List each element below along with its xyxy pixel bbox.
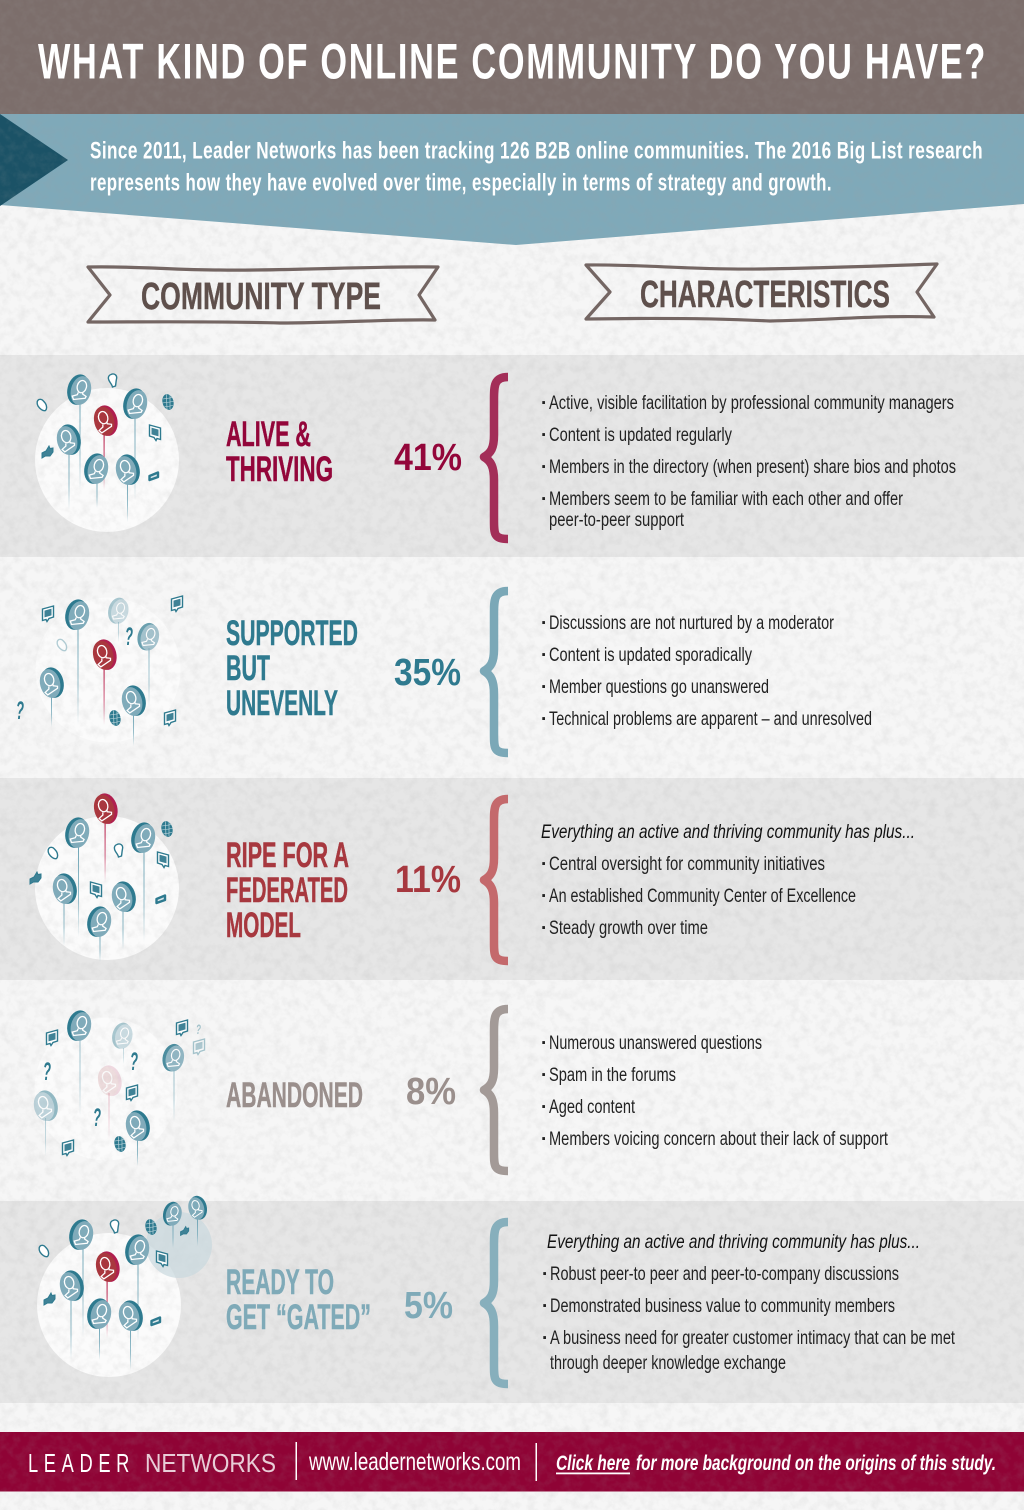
characteristics: row 3: · (541, 886, 547, 907)
characteristics: row 4: Spam in the forums (549, 1065, 676, 1086)
label: supported but unevenly: UNEVENLY (226, 684, 338, 723)
label: supported but unevenly: BUT (226, 649, 270, 688)
brace: row 2 (484, 591, 508, 753)
percent: 35: 35% (394, 652, 461, 694)
characteristics: row 4: Aged content (549, 1097, 636, 1118)
characteristics: row 2: Discussions are not nurtured by a moderator (549, 613, 834, 634)
characteristics: row 1: Content is updated regularly (549, 425, 732, 446)
label: ready to get gated (226, 1263, 371, 1337)
footer divider (536, 1443, 537, 1481)
characteristics: row 2: Content is updated sporadically (549, 645, 752, 666)
characteristics: row 3: Everything an active and thriving community has plus... (541, 822, 915, 843)
icon cluster: abandoned: ? (130, 1048, 138, 1076)
label: ripe for a federated model: MODEL (226, 906, 301, 945)
characteristics: row 2 (541, 613, 872, 730)
percent: 41: 41% (394, 437, 462, 479)
banner arrow (0, 114, 68, 206)
icon cluster: ripe for a federated model (30, 791, 174, 962)
header band (0, 0, 1024, 114)
label: supported but unevenly: SUPPORTED (226, 614, 358, 653)
footer logo (28, 1448, 276, 1478)
characteristics: row 5: through deeper knowledge exchange (550, 1353, 786, 1374)
characteristics: row 4: Numerous unanswered questions (549, 1033, 762, 1054)
percent: 11: 11% (395, 859, 461, 901)
brace: row 3 (484, 799, 508, 961)
characteristics: row 5: · (542, 1296, 548, 1317)
footer band (0, 1432, 1024, 1492)
characteristics: row 4 (541, 1033, 889, 1150)
characteristics: row 5: · (542, 1264, 548, 1285)
characteristics: row 1: · (541, 457, 547, 478)
characteristics: row 5: · (542, 1328, 548, 1349)
brace: row 1 (484, 377, 508, 539)
characteristics: row 1: · (541, 425, 547, 446)
characteristics: row 1: Members seem to be familiar with each other and offer (549, 489, 904, 510)
heading ribbon: community type: COMMUNITY TYPE (141, 276, 381, 318)
characteristics: row 4: · (541, 1065, 547, 1086)
characteristics: row 5 (542, 1232, 956, 1374)
characteristics: row 2: Technical problems are apparent – and unresolved (549, 709, 872, 730)
label: alive and thriving (226, 415, 333, 489)
label: alive and thriving: ALIVE & (226, 415, 311, 454)
icon cluster: supported but unevenly (16, 596, 182, 746)
footer call to action: Click here (556, 1451, 630, 1475)
footer logo: LEADER (28, 1448, 135, 1478)
characteristics: row 4: · (541, 1033, 547, 1054)
intro text (90, 138, 983, 196)
heading ribbon: characteristics (586, 264, 937, 321)
heading ribbon: community type (88, 267, 438, 323)
characteristics: row 5: Everything an active and thriving community has plus... (547, 1232, 920, 1253)
footer url: www.leadernetworks.com (308, 1448, 521, 1476)
characteristics: row 2: · (541, 613, 547, 634)
white circles behind icons (34, 388, 181, 1377)
label: ready to get gated: GET “GATED” (226, 1298, 371, 1337)
brace: row 5 (484, 1222, 508, 1384)
characteristics: row 4: · (541, 1129, 547, 1150)
percent: 8: 8% (406, 1071, 456, 1113)
characteristics: row 1: · (541, 393, 547, 414)
characteristics: row 1: peer-to-peer support (549, 510, 685, 531)
characteristics: row 5: Robust peer-to peer and peer-to-company discussions (550, 1264, 899, 1285)
heading ribbon: characteristics: CHARACTERISTICS (640, 274, 890, 316)
icon cluster: supported but unevenly: ? (125, 623, 133, 651)
footer divider (296, 1442, 297, 1480)
characteristics: row 1: · (541, 489, 547, 510)
brace: row 4 (484, 1009, 508, 1171)
characteristics: row 3: An established Community Center of Excellence (549, 886, 856, 907)
icon cluster: supported but unevenly: ? (16, 697, 24, 725)
characteristics: row 4: · (541, 1097, 547, 1118)
label: alive and thriving: THRIVING (226, 450, 333, 489)
label: ripe for a federated model (226, 836, 349, 945)
characteristics: row 3: Central oversight for community initiatives (549, 854, 825, 875)
characteristics: row 1 (541, 393, 956, 531)
characteristics: row 2: Member questions go unanswered (549, 677, 769, 698)
icon cluster: abandoned: ? (196, 1021, 201, 1037)
footer logo: NETWORKS (145, 1448, 276, 1478)
icon cluster: alive and thriving (37, 372, 175, 522)
characteristics: row 3: · (541, 854, 547, 875)
characteristics: row 2: · (541, 677, 547, 698)
icon cluster: ready to get gated (39, 1194, 212, 1370)
characteristics: row 2: · (541, 709, 547, 730)
icon cluster: abandoned (31, 1008, 204, 1166)
characteristics: row 4: Members voicing concern about their lack of support (549, 1129, 889, 1150)
characteristics: row 3 (541, 822, 915, 939)
label: ripe for a federated model: RIPE FOR A (226, 836, 349, 875)
characteristics: row 2: · (541, 645, 547, 666)
row bands (0, 355, 1024, 1403)
characteristics: row 3: Steady growth over time (549, 918, 708, 939)
label: ready to get gated: READY TO (226, 1263, 334, 1302)
percent: 5: 5% (404, 1285, 453, 1327)
intro banner (0, 114, 1024, 245)
label: supported but unevenly (226, 614, 358, 723)
label: ripe for a federated model: FEDERATED (226, 871, 348, 910)
icon cluster: abandoned: ? (43, 1058, 51, 1086)
icon cluster: abandoned: ? (93, 1104, 101, 1132)
characteristics: row 3: · (541, 918, 547, 939)
label: abandoned: ABANDONED (226, 1076, 363, 1115)
characteristics: row 5: Demonstrated business value to community members (550, 1296, 895, 1317)
